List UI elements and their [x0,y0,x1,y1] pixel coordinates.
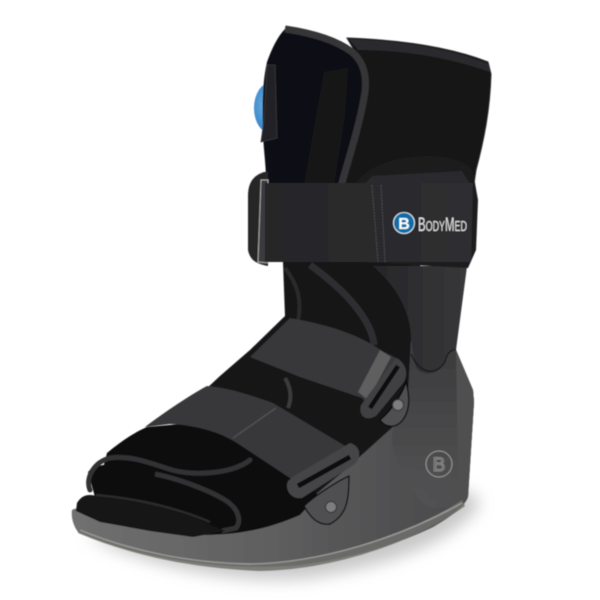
rear strap loop [248,172,268,266]
plate inner [365,171,470,184]
strap stitch seam [372,185,385,262]
mid strut [285,378,290,408]
sole tread [78,500,465,571]
strap guard plate [355,156,478,268]
upper hinge plate [380,382,409,426]
upper hinge slot [370,366,398,408]
strap seam [233,408,276,438]
upper hinge buckle [360,358,406,418]
upper strap webbing [358,350,391,400]
boot [72,29,491,571]
upper foot strap [250,318,404,406]
toe flap edge [89,457,250,490]
lower leg padding [205,262,425,505]
heel shell [72,266,474,571]
shell body [72,266,474,567]
lower hinge rivet [326,502,336,512]
rear sleeve top binding [349,39,490,72]
ground shadow [85,490,480,580]
insole [76,495,225,537]
back ankle hardware [248,172,268,266]
logo badge: blue B [394,212,414,234]
front strut [285,268,299,322]
emblem: B circle on shell [426,451,452,477]
pump tab [261,65,277,142]
upper post [373,266,467,374]
ankle strap [265,156,478,268]
upper hinge [360,358,409,426]
lower hinge slot [298,457,350,486]
strap band [265,183,473,262]
lower hinge plate [304,476,349,524]
dark heel shading [392,345,474,508]
sleeve vertical fold [304,68,348,185]
lower foot strap [145,386,352,482]
inner strut [310,265,374,345]
rear sleeve panel [340,38,491,190]
second flap edge [155,474,239,531]
shell notch line [411,349,456,371]
heel side panel [456,350,474,505]
air pump ball [254,83,286,133]
toe sock lining [88,464,238,533]
lower hinge buckle [287,443,359,498]
foot area [76,318,409,537]
upper sleeve [261,29,491,190]
foot padding [100,420,318,535]
emblem: B circle on shell: B [433,455,445,476]
insole ridge [96,495,210,522]
upper hinge rivet [392,400,404,410]
metal buckle [258,180,268,263]
front sleeve panel [263,29,364,190]
lower hinge [287,443,359,524]
front sleeve binding edge [285,29,366,186]
logo badge: blue B: B [398,216,410,233]
sole edge line [80,503,462,564]
logo wordmark: BODYMED [418,215,467,236]
